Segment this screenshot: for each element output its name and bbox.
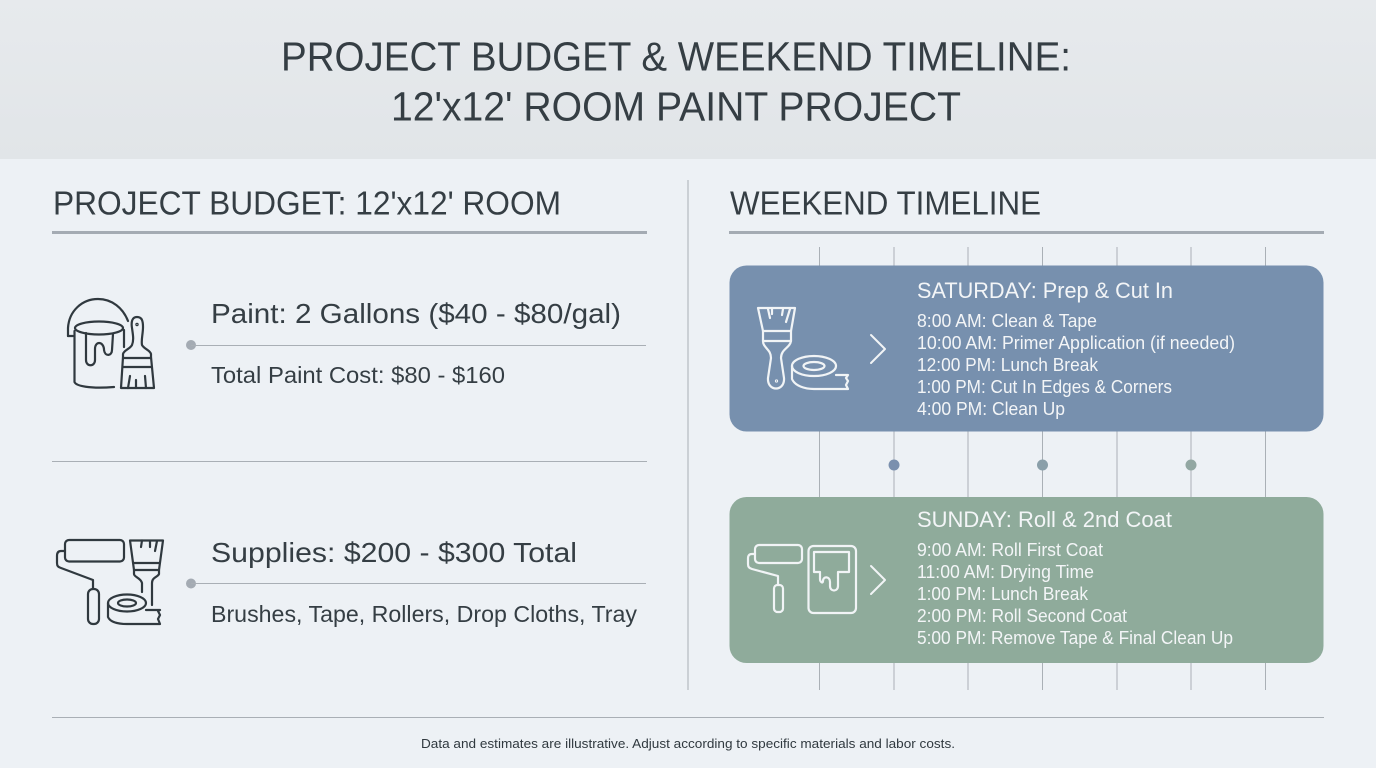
panel: project budget <box>52 186 647 627</box>
card text: 2:00 PM: Roll Second Coat <box>917 606 1127 626</box>
card text: 12:00 PM: Lunch Break <box>917 355 1099 375</box>
card: saturday <box>730 266 1324 432</box>
icon: roller and paint can <box>748 545 856 613</box>
card text: 10:00 AM: Primer Application (if needed) <box>917 333 1235 353</box>
card text: 4:00 PM: Clean Up <box>917 399 1065 419</box>
panel: weekend timeline <box>729 186 1324 690</box>
title: PROJECT BUDGET & WEEKEND TIMELINE: <box>281 34 1071 80</box>
icon: chevron <box>871 566 885 594</box>
card text: SATURDAY: Prep & Cut In <box>917 278 1173 303</box>
icon: brush and tape <box>758 308 848 389</box>
heading: project budget: PROJECT BUDGET: 12'x12' ROOM <box>53 186 561 222</box>
card: sunday <box>730 497 1324 663</box>
budget item: supplies: Supplies: $200 - $300 Total <box>211 537 577 568</box>
footer: Data and estimates are illustrative. Adjust according to specific materials and labor costs. <box>421 737 955 751</box>
card text: 9:00 AM: Roll First Coat <box>917 540 1103 560</box>
card text: SUNDAY: Roll & 2nd Coat <box>917 507 1173 532</box>
budget item: paint: Total Paint Cost: $80 - $160 <box>211 362 505 388</box>
icon: roller, brush and tape <box>57 540 163 624</box>
icon: paint can and brush <box>68 299 154 388</box>
card text: 5:00 PM: Remove Tape & Final Clean Up <box>917 628 1233 648</box>
budget item: paint <box>186 298 646 388</box>
card text <box>917 507 1233 648</box>
heading: weekend timeline <box>729 186 1324 234</box>
timeline dots <box>888 460 1196 470</box>
icon: chevron <box>871 335 885 363</box>
card text: 1:00 PM: Lunch Break <box>917 584 1089 604</box>
card text: 1:00 PM: Cut In Edges & Corners <box>917 377 1172 397</box>
card text: 11:00 AM: Drying Time <box>917 562 1094 582</box>
budget item: paint: Paint: 2 Gallons ($40 - $80/gal) <box>211 298 621 329</box>
heading: project budget <box>52 186 647 234</box>
budget item: supplies <box>186 537 646 627</box>
center divider <box>688 180 689 690</box>
header band <box>0 0 1376 159</box>
budget item: supplies: Brushes, Tape, Rollers, Drop Cloths, Tray <box>211 601 637 627</box>
card text: 8:00 AM: Clean & Tape <box>917 311 1097 331</box>
timeline grid lines <box>819 247 1266 690</box>
title: 12'x12' ROOM PAINT PROJECT <box>391 84 961 130</box>
heading: weekend timeline: WEEKEND TIMELINE <box>730 186 1041 222</box>
title <box>281 34 1071 130</box>
card text <box>917 278 1235 419</box>
